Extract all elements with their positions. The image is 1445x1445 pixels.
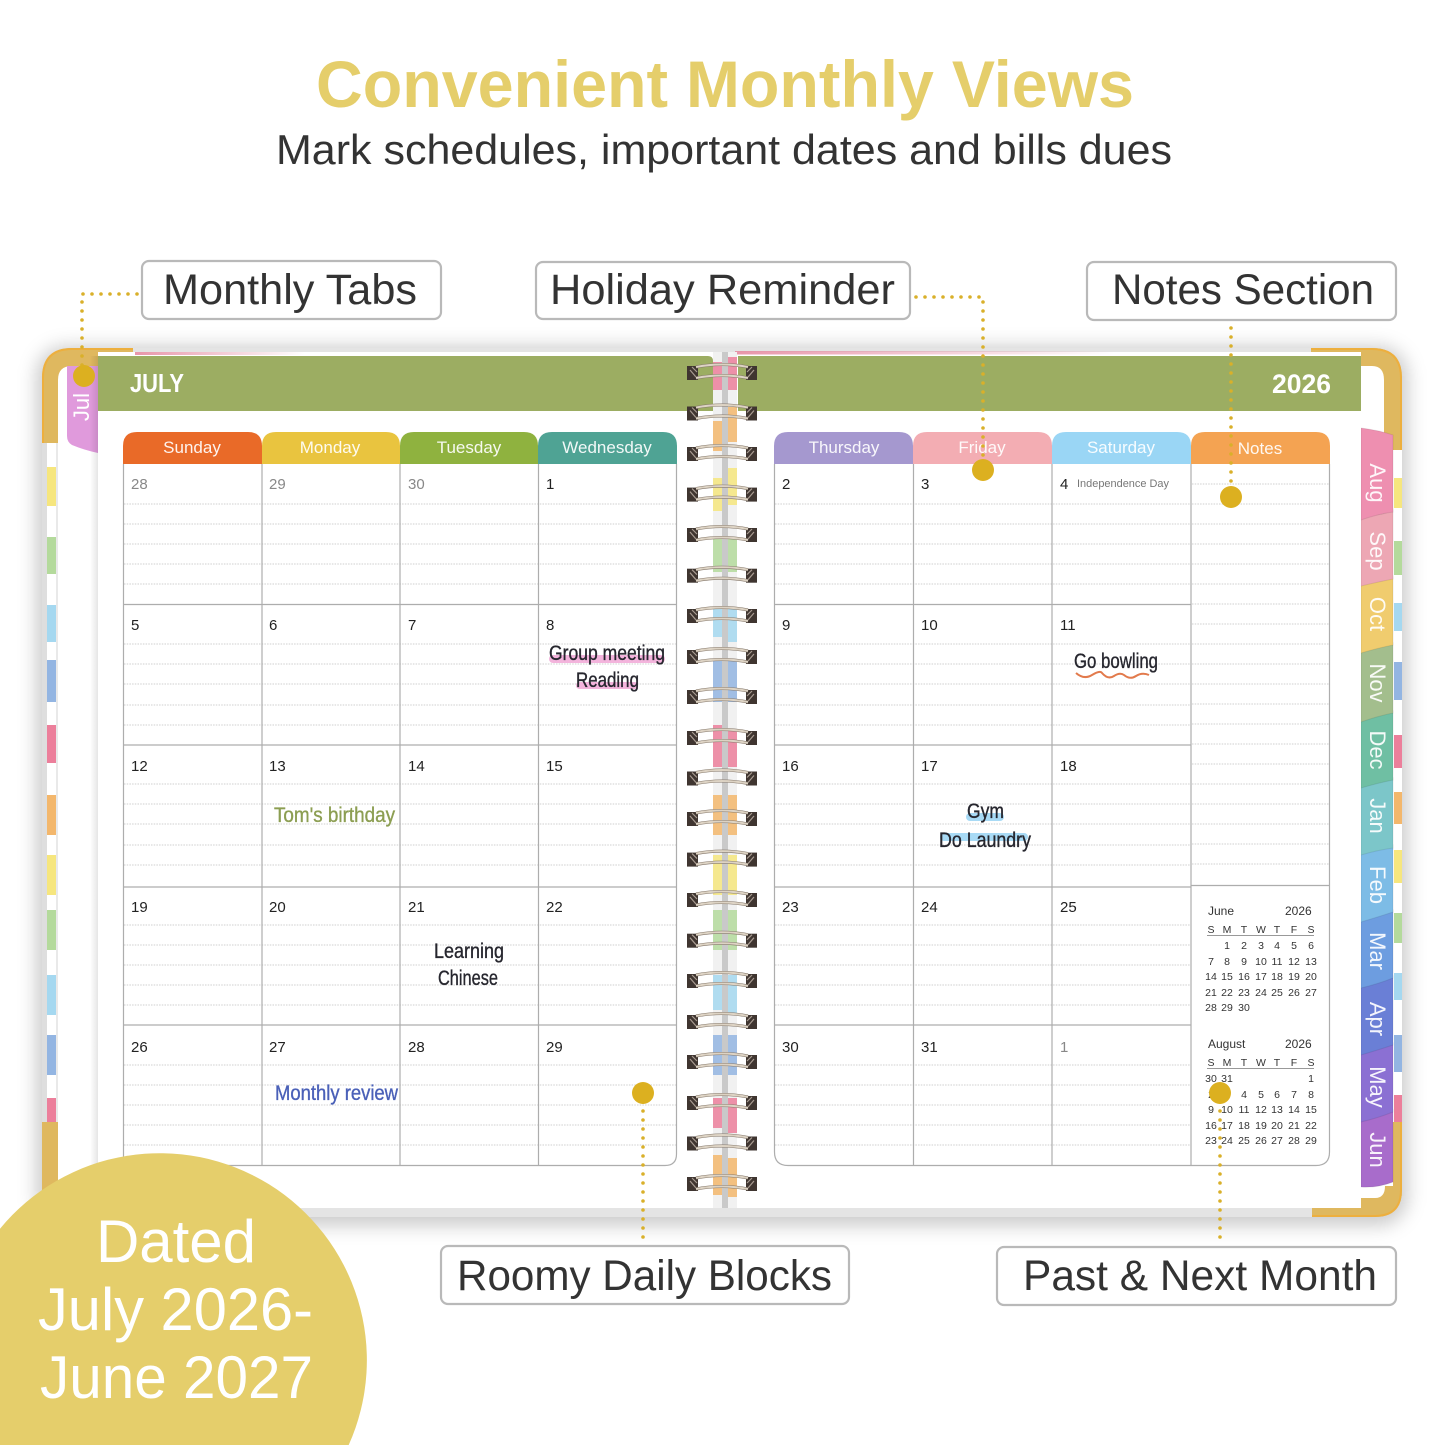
date numbers: 29 bbox=[546, 1039, 563, 1056]
tab: Oct: Oct bbox=[1365, 597, 1390, 631]
callout: Notes Section: Notes Section bbox=[1112, 266, 1374, 314]
weekday: Sunday bbox=[123, 432, 262, 464]
mini calendar: June 2026: 17 bbox=[1255, 971, 1267, 983]
callout: Monthly Tabs bbox=[142, 261, 441, 319]
date numbers: 7 bbox=[408, 617, 416, 634]
mini calendar: June 2026: 10 bbox=[1255, 956, 1267, 968]
tab: May bbox=[1361, 1043, 1393, 1122]
mini calendar: August 2026: 5 bbox=[1258, 1089, 1264, 1101]
gold corner: top left bbox=[42, 348, 133, 443]
planner bbox=[36, 346, 1408, 1226]
mini calendar: June 2026 bbox=[1205, 904, 1317, 1014]
mini calendar: June 2026: 3 bbox=[1258, 940, 1264, 952]
right page bbox=[734, 352, 1361, 1208]
inside cover bbox=[47, 362, 1397, 1204]
mini calendar: August 2026: 30 bbox=[1205, 1073, 1217, 1085]
weekday: Thursday bbox=[774, 432, 913, 464]
mini calendar: August 2026: 4 bbox=[1241, 1089, 1247, 1101]
spiral binding bbox=[687, 364, 757, 1191]
mini calendar: August 2026: 19 bbox=[1255, 1120, 1267, 1132]
mini calendar: June 2026: S bbox=[1207, 924, 1215, 936]
note: Group meeting, Reading bbox=[549, 642, 665, 692]
note: Go bowling: Go bowling bbox=[1074, 650, 1158, 673]
mini calendar: June 2026: 29 bbox=[1221, 1002, 1233, 1014]
date numbers: 5 bbox=[131, 617, 139, 634]
mini calendar: August 2026: T bbox=[1274, 1057, 1281, 1069]
mini calendar: June 2026: 2026 bbox=[1285, 904, 1312, 918]
weekday: Saturday bbox=[1052, 432, 1191, 464]
mini calendar: August 2026: 21 bbox=[1288, 1120, 1300, 1132]
mini calendar: August 2026: F bbox=[1291, 1057, 1297, 1069]
date numbers: 13 bbox=[269, 758, 286, 775]
left header band: JULY bbox=[130, 368, 184, 398]
gold corner: bottom right bbox=[1312, 1122, 1402, 1217]
mini calendar: August 2026: 17 bbox=[1221, 1120, 1233, 1132]
note: Monthly review: Monthly review bbox=[275, 1082, 399, 1105]
connector: Roomy Daily Blocks bbox=[632, 1082, 654, 1245]
callout: Roomy Daily Blocks: Roomy Daily Blocks bbox=[457, 1252, 832, 1300]
mini calendar: August 2026: 2 bbox=[1208, 1089, 1214, 1101]
date numbers: 23 bbox=[782, 899, 799, 916]
mini calendar: June 2026: 13 bbox=[1305, 956, 1317, 968]
mini calendar: August 2026: S bbox=[1307, 1057, 1315, 1069]
tab: Jan bbox=[1361, 778, 1393, 855]
right calendar grid bbox=[774, 432, 1330, 1166]
right header band: 2026 bbox=[1272, 369, 1331, 399]
gold corner edge: top left bbox=[43, 349, 133, 443]
tab: Aug: Aug bbox=[1365, 463, 1390, 503]
weekday: Friday bbox=[913, 432, 1052, 464]
tab: Jun: Jun bbox=[1365, 1132, 1390, 1168]
mini calendar: June 2026: 5 bbox=[1291, 940, 1297, 952]
tab: Mar bbox=[1361, 910, 1393, 988]
connector: Monthly Tabs bbox=[73, 294, 137, 387]
note: Tom's birthday: Tom's birthday bbox=[274, 804, 395, 827]
subtitle: Mark schedules, important dates and bills dues bbox=[276, 126, 1172, 173]
mini calendar: June 2026: 1 bbox=[1224, 940, 1230, 952]
tab: Oct bbox=[1361, 577, 1393, 653]
mini calendar: June 2026: 24 bbox=[1255, 987, 1267, 999]
date numbers: 26 bbox=[131, 1039, 148, 1056]
note: Learning Chinese: Chinese bbox=[438, 967, 498, 990]
date numbers bbox=[131, 476, 563, 1056]
left page bbox=[98, 352, 716, 1208]
mini calendar: June 2026: T bbox=[1241, 924, 1248, 936]
tab: Nov: Nov bbox=[1365, 663, 1390, 703]
mini calendar: June 2026: T bbox=[1274, 924, 1281, 936]
gold corner: bottom left bbox=[42, 1122, 58, 1212]
mini calendar: June 2026: 25 bbox=[1271, 987, 1283, 999]
tab: Feb bbox=[1361, 845, 1393, 922]
mini calendar: June 2026: 27 bbox=[1305, 987, 1317, 999]
date numbers: 18 bbox=[1060, 758, 1077, 775]
mini calendar: June 2026: 2 bbox=[1241, 940, 1247, 952]
spine colour strips bbox=[713, 357, 737, 1197]
date numbers: 11 bbox=[1060, 617, 1076, 634]
gold corner edge: top right bbox=[1311, 349, 1401, 450]
grid frame bbox=[124, 464, 676, 1166]
mini calendar: August 2026: T bbox=[1241, 1057, 1248, 1069]
mini calendar: June 2026: June bbox=[1208, 904, 1234, 918]
date numbers: 16 bbox=[782, 758, 799, 775]
tab: Jul bbox=[67, 366, 98, 453]
mini calendar: August 2026: 15 bbox=[1305, 1104, 1317, 1116]
date numbers: 29 bbox=[269, 476, 286, 493]
badge: date range: July 2026- bbox=[38, 1276, 313, 1343]
tab: Aug bbox=[1361, 428, 1393, 520]
mini calendar: August 2026: S bbox=[1207, 1057, 1215, 1069]
date numbers: 10 bbox=[921, 617, 938, 634]
mini calendar: June 2026: 22 bbox=[1221, 987, 1233, 999]
mini calendar: June 2026: M bbox=[1223, 924, 1231, 936]
date numbers: 12 bbox=[131, 758, 148, 775]
mini calendar: August 2026: August bbox=[1208, 1037, 1246, 1051]
mini calendar: June 2026: 11 bbox=[1272, 956, 1283, 968]
weekday: Monday bbox=[262, 432, 400, 464]
tab: Nov bbox=[1361, 643, 1393, 722]
gold corner edge: bottom right bbox=[1312, 1122, 1401, 1216]
mini calendar: June 2026: 14 bbox=[1205, 971, 1217, 983]
date numbers: 3 bbox=[921, 476, 929, 493]
date numbers: 8 bbox=[546, 617, 554, 634]
note: Group meeting, Reading: Reading bbox=[576, 669, 639, 692]
date numbers: 28 bbox=[408, 1039, 425, 1056]
cover base bbox=[42, 348, 1402, 1217]
mini calendar: August 2026: 28 bbox=[1288, 1135, 1300, 1147]
date numbers: 6 bbox=[269, 617, 277, 634]
mini calendar: June 2026: 9 bbox=[1241, 956, 1247, 968]
tab: Jun bbox=[1361, 1110, 1393, 1187]
mini calendar: June 2026: 28 bbox=[1205, 1002, 1217, 1014]
date numbers: 1 bbox=[1060, 1039, 1068, 1056]
mini calendar: August 2026: 20 bbox=[1271, 1120, 1283, 1132]
weekday: Thursday: Thursday bbox=[809, 438, 880, 457]
mini calendar: August 2026: 24 bbox=[1221, 1135, 1233, 1147]
tab: Jan: Jan bbox=[1365, 798, 1390, 834]
note: Gym, Do Laundry: Do Laundry bbox=[939, 829, 1031, 852]
badge: date range: June 2027 bbox=[40, 1344, 313, 1411]
date numbers: 28 bbox=[131, 476, 148, 493]
left header band bbox=[98, 356, 713, 411]
mini calendar: August 2026: 29 bbox=[1305, 1135, 1317, 1147]
mini calendar: August 2026: W bbox=[1256, 1057, 1266, 1069]
mini calendar: June 2026: 20 bbox=[1305, 971, 1317, 983]
mini calendar: August 2026: 3 bbox=[1224, 1089, 1230, 1101]
mini calendar: June 2026: 7 bbox=[1208, 956, 1214, 968]
right month tabs bbox=[1361, 428, 1393, 1187]
mini calendar: August 2026: 26 bbox=[1255, 1135, 1267, 1147]
weekday: Wednesday: Wednesday bbox=[562, 438, 652, 457]
note: Learning Chinese bbox=[434, 940, 504, 990]
date numbers: 2 bbox=[782, 476, 790, 493]
date numbers: 30 bbox=[782, 1039, 799, 1056]
date numbers: 21 bbox=[408, 899, 425, 916]
mini calendar: June 2026: 21 bbox=[1205, 987, 1217, 999]
date numbers: 25 bbox=[1060, 899, 1077, 916]
ruled lines bbox=[124, 504, 677, 1145]
weekday: Wednesday bbox=[538, 432, 677, 464]
tab: Dec bbox=[1361, 711, 1393, 788]
callout: Monthly Tabs: Monthly Tabs bbox=[163, 266, 417, 314]
mini calendar: June 2026: S bbox=[1307, 924, 1315, 936]
mini calendar: June 2026: 23 bbox=[1238, 987, 1250, 999]
badge: date range bbox=[0, 1153, 367, 1445]
weekday: Sunday: Sunday bbox=[163, 438, 221, 457]
mini calendar: August 2026: 23 bbox=[1205, 1135, 1217, 1147]
title: Convenient Monthly Views bbox=[316, 47, 1134, 121]
mini calendar: August 2026: 25 bbox=[1238, 1135, 1250, 1147]
callout: Holiday Reminder: Holiday Reminder bbox=[550, 266, 895, 314]
mini calendar: June 2026: 30 bbox=[1238, 1002, 1250, 1014]
right header band bbox=[738, 356, 1361, 411]
mini calendar: August 2026: 18 bbox=[1238, 1120, 1250, 1132]
date numbers: 4 bbox=[1060, 476, 1068, 493]
mini calendar: August 2026: 31 bbox=[1221, 1073, 1233, 1085]
date numbers: 30 bbox=[408, 476, 425, 493]
connector: Past & Next Month bbox=[1209, 1082, 1231, 1245]
left calendar grid bbox=[123, 432, 677, 1166]
mini calendar: August 2026: 13 bbox=[1271, 1104, 1283, 1116]
weekday: Saturday: Saturday bbox=[1087, 438, 1156, 457]
mini calendar: June 2026: 16 bbox=[1238, 971, 1250, 983]
date numbers: 1 bbox=[546, 476, 554, 493]
tab: Apr bbox=[1361, 976, 1393, 1055]
tab: Mar: Mar bbox=[1365, 932, 1390, 970]
date numbers: 9 bbox=[782, 617, 790, 634]
ruled lines bbox=[775, 484, 1329, 1145]
tab: Sep: Sep bbox=[1365, 531, 1390, 571]
tab: Sep bbox=[1361, 510, 1393, 586]
grid frame bbox=[774, 464, 1330, 1166]
mini calendar: August 2026 bbox=[1205, 1037, 1317, 1147]
mini calendar: August 2026: 9 bbox=[1208, 1104, 1214, 1116]
weekday: Monday: Monday bbox=[300, 438, 361, 457]
mini calendar: August 2026: 10 bbox=[1221, 1104, 1233, 1116]
mini calendar: June 2026: 8 bbox=[1224, 956, 1230, 968]
badge: date range: Dated bbox=[96, 1208, 256, 1275]
tab: Jul: Jul bbox=[69, 393, 94, 421]
holiday: Independence Day: Independence Day bbox=[1077, 478, 1169, 490]
mini calendar: August 2026: 1 bbox=[1308, 1073, 1314, 1085]
note: Gym, Do Laundry: Gym bbox=[967, 800, 1004, 823]
mini calendar: August 2026: 14 bbox=[1288, 1104, 1300, 1116]
mini calendar: June 2026: 18 bbox=[1271, 971, 1283, 983]
weekday: Tuesday bbox=[400, 432, 538, 464]
gold corner: top right bbox=[1311, 348, 1402, 450]
mini calendar: August 2026: 7 bbox=[1291, 1089, 1297, 1101]
mini calendar: August 2026: 6 bbox=[1274, 1089, 1280, 1101]
mini calendar: June 2026: 15 bbox=[1221, 971, 1233, 983]
date numbers bbox=[782, 476, 1077, 1056]
date numbers: 15 bbox=[546, 758, 563, 775]
page top edge colours bbox=[135, 351, 1115, 355]
tab: Dec: Dec bbox=[1365, 730, 1390, 770]
date numbers: 22 bbox=[546, 899, 563, 916]
mini calendar: August 2026: 16 bbox=[1205, 1120, 1217, 1132]
date numbers: 14 bbox=[408, 758, 425, 775]
tab: May: May bbox=[1365, 1066, 1390, 1108]
tab: Feb: Feb bbox=[1365, 866, 1390, 904]
note: Group meeting, Reading: Group meeting bbox=[549, 642, 665, 665]
date numbers: 20 bbox=[269, 899, 286, 916]
mini calendar: August 2026: 12 bbox=[1255, 1104, 1267, 1116]
mini calendar: August 2026: 22 bbox=[1305, 1120, 1317, 1132]
heading: Notes bbox=[1191, 432, 1330, 464]
callout: Past & Next Month: Past & Next Month bbox=[1023, 1252, 1377, 1300]
mini calendar: August 2026: 8 bbox=[1308, 1089, 1314, 1101]
mini calendar: August 2026: M bbox=[1223, 1057, 1231, 1069]
mini calendar: June 2026: 12 bbox=[1288, 956, 1300, 968]
date numbers: 24 bbox=[921, 899, 938, 916]
heading: Notes: Notes bbox=[1238, 439, 1282, 458]
weekday: Tuesday: Tuesday bbox=[437, 438, 502, 457]
mini calendar: August 2026: 2026 bbox=[1285, 1037, 1312, 1051]
date numbers: 27 bbox=[269, 1039, 286, 1056]
mini calendar: June 2026: 19 bbox=[1288, 971, 1300, 983]
mini calendar: June 2026: 4 bbox=[1274, 940, 1280, 952]
left page-edge colour strip bbox=[42, 440, 58, 1130]
note: Gym, Do Laundry bbox=[939, 800, 1031, 852]
mini calendar: June 2026: W bbox=[1256, 924, 1266, 936]
date numbers: 19 bbox=[131, 899, 148, 916]
note: Go bowling bbox=[1074, 650, 1158, 678]
date numbers: 17 bbox=[921, 758, 938, 775]
mini calendar: June 2026: F bbox=[1291, 924, 1297, 936]
mini calendar: June 2026: 26 bbox=[1288, 987, 1300, 999]
connector: Notes Section bbox=[1220, 328, 1242, 508]
page shadow bbox=[90, 356, 98, 1208]
connector: Holiday Reminder bbox=[916, 297, 994, 481]
mini calendar: August 2026: 27 bbox=[1271, 1135, 1283, 1147]
spine bbox=[713, 352, 737, 1208]
mini calendar: August 2026: 11 bbox=[1239, 1104, 1250, 1116]
right page-edge colour strip bbox=[1394, 448, 1402, 1128]
weekday: Friday: Friday bbox=[958, 438, 1006, 457]
mini calendar: June 2026: 6 bbox=[1308, 940, 1314, 952]
date numbers: 31 bbox=[921, 1039, 938, 1056]
note: Learning Chinese: Learning bbox=[434, 940, 504, 963]
planner shadow bbox=[36, 346, 1408, 1226]
tab: Apr: Apr bbox=[1365, 1002, 1390, 1036]
